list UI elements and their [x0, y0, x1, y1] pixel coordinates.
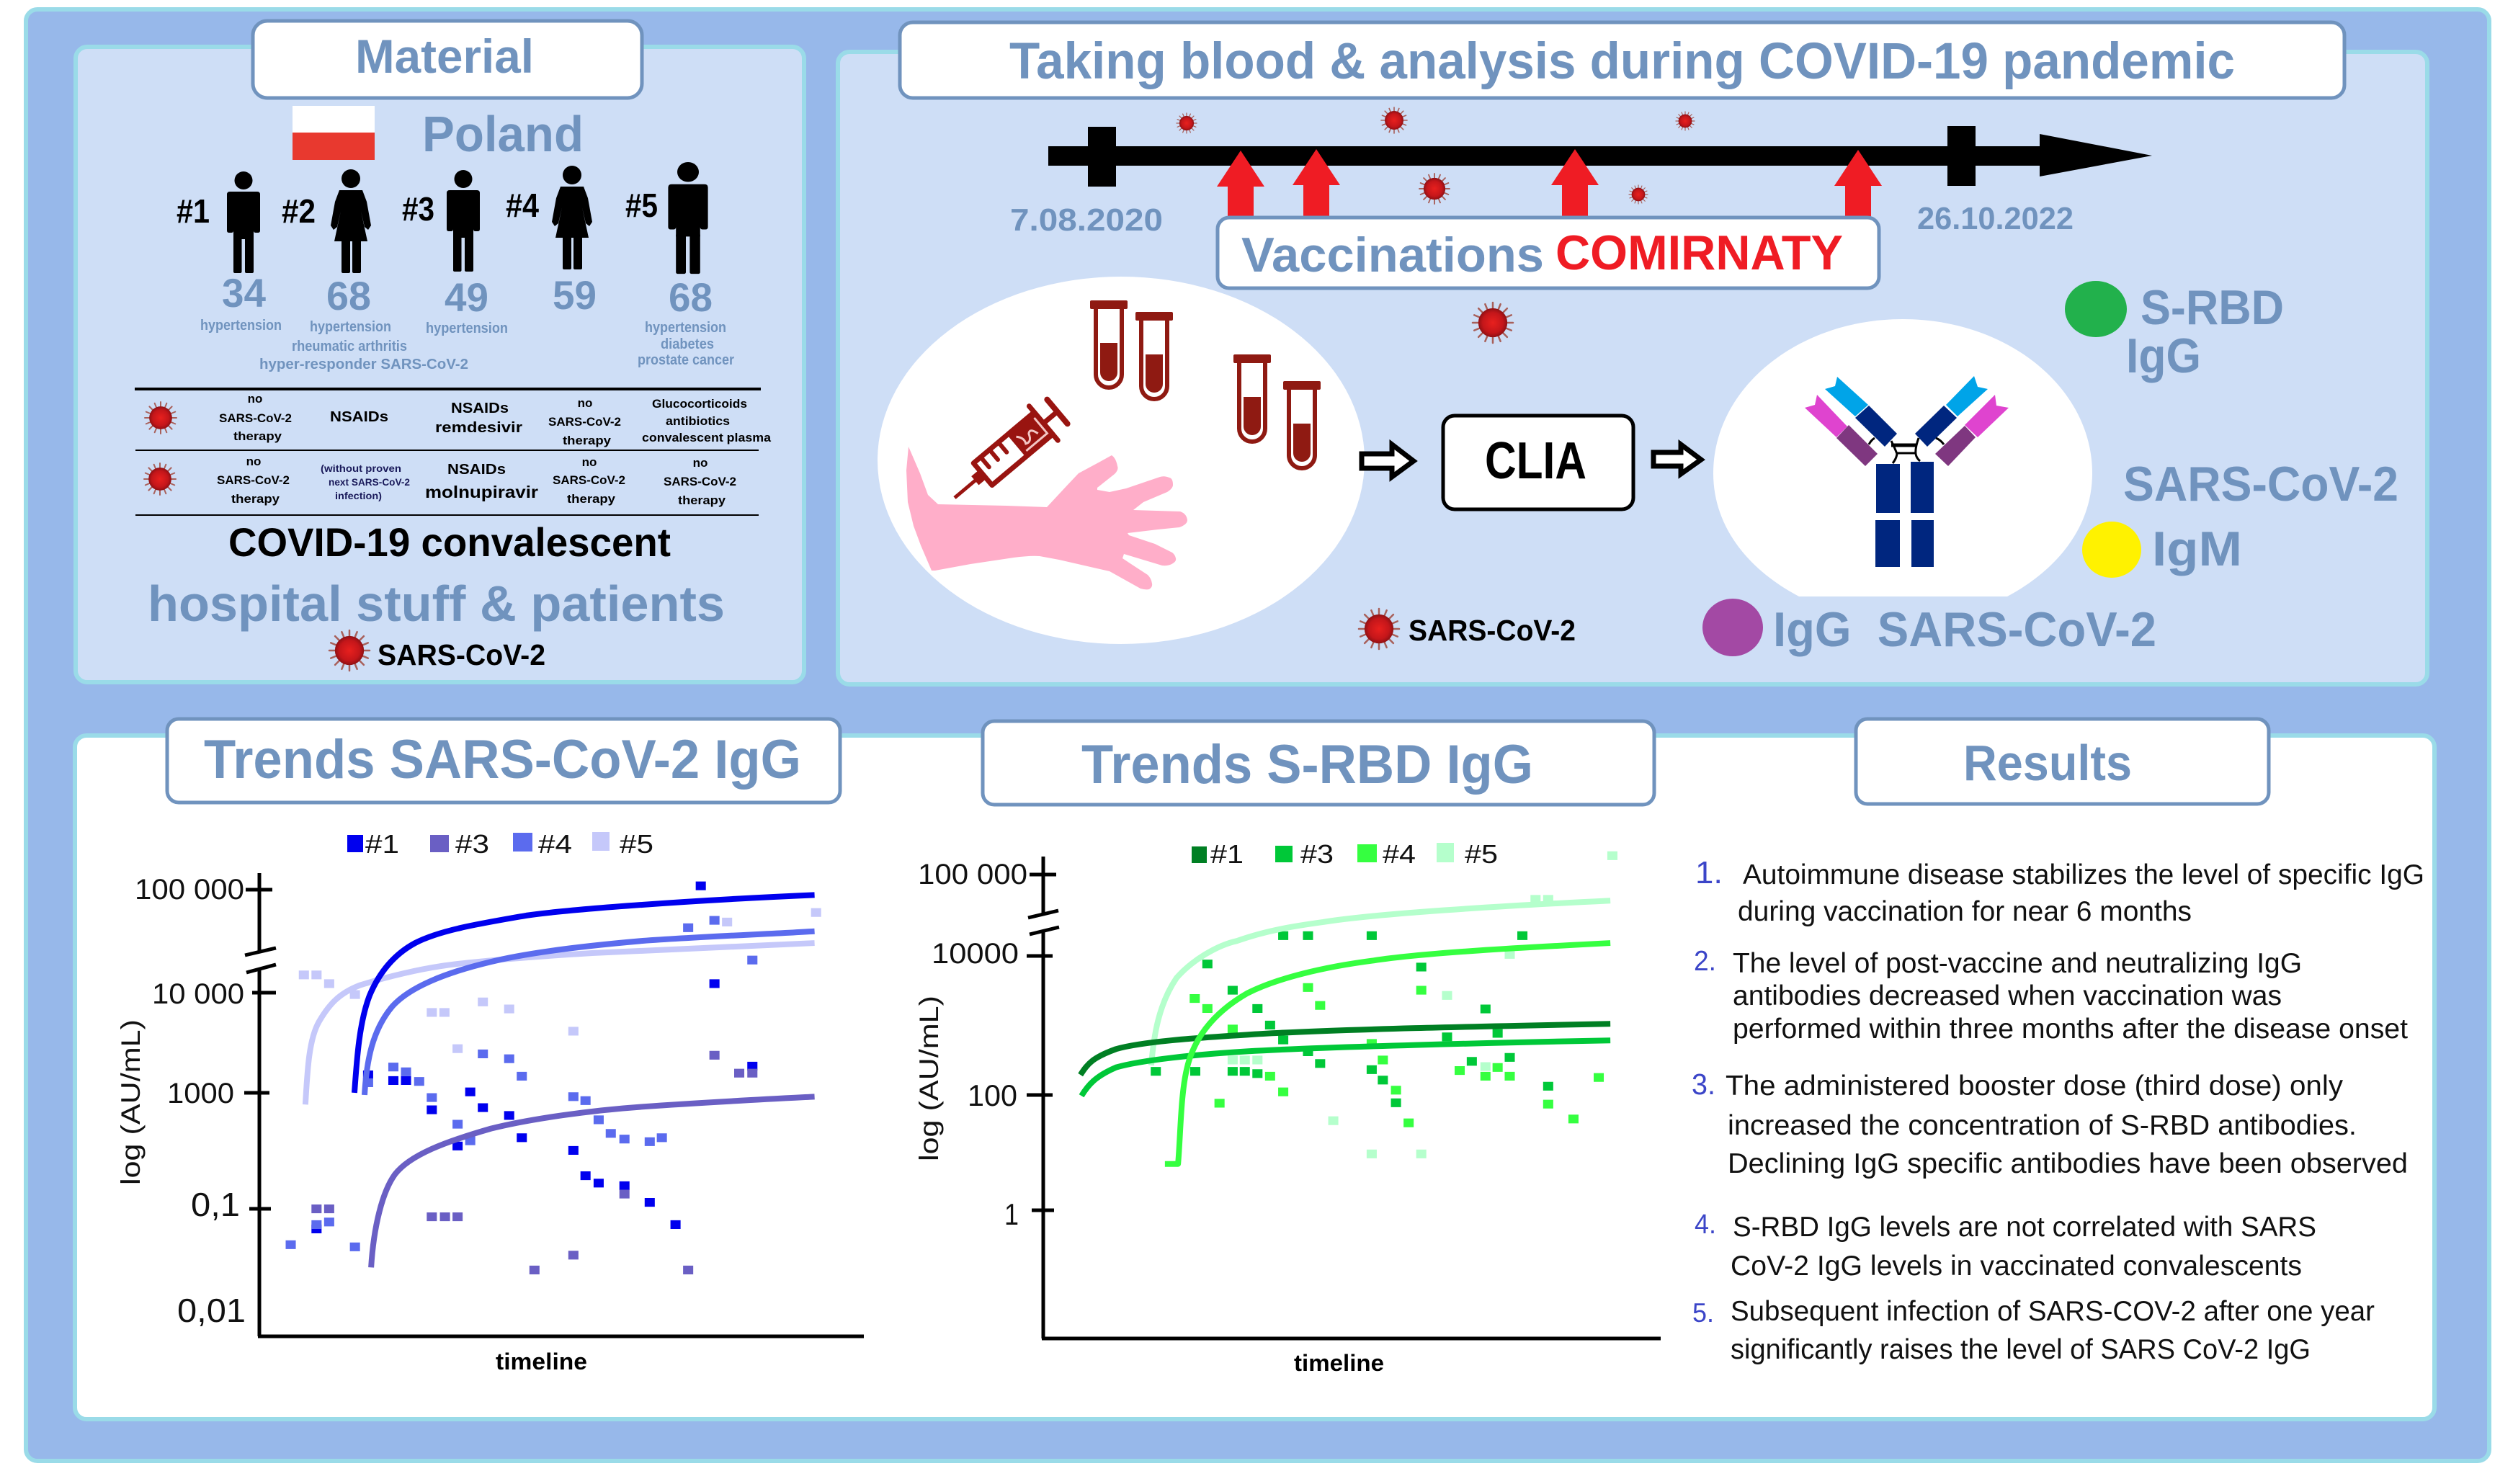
- caption: hospital staff and patients: hospital stuff & patients: [148, 576, 725, 632]
- axes: chart 2: [1027, 857, 1661, 1338]
- box: CLIA: CLIA: [1485, 432, 1586, 490]
- data: chart 2 points and curves: [1081, 856, 1612, 1164]
- legend: chart 1: #3: [455, 829, 489, 859]
- axis labels: chart 2: 10000: [932, 938, 1019, 970]
- result 1: during vaccination for near 6 months: [1738, 896, 2192, 927]
- therapy row 1: therapy: [233, 429, 282, 443]
- heading: trends SARS-CoV-2: Trends SARS-CoV-2 IgG: [204, 729, 801, 790]
- result 4: CoV-2 IgG levels in vaccinated convalescents: [1731, 1251, 2302, 1282]
- data: chart 1 points and curves: [291, 886, 816, 1270]
- icon: virus row 2: [144, 463, 176, 495]
- therapy row 1: convalescent plasma: [642, 431, 772, 444]
- patient 5: diabetes: [661, 336, 714, 352]
- result 3: 3.: [1692, 1068, 1715, 1101]
- axis labels: chart 1: 10 000: [152, 978, 244, 1010]
- patient 1: hypertension: [200, 318, 282, 334]
- heading: trends S-RBD: Trends S-RBD IgG: [1081, 734, 1533, 795]
- axis labels: chart 2: 100 000: [918, 859, 1027, 890]
- result 3: [1692, 1068, 2408, 1179]
- axis labels: chart 2: log (AU/mL): [914, 996, 944, 1161]
- axis labels: chart 1: 0,01: [177, 1292, 246, 1329]
- antibody hinge: [1869, 438, 1944, 463]
- therapy row 2: infection): [335, 490, 382, 501]
- icon: syringe: [940, 395, 1071, 515]
- legend: chart 2: #4: [1383, 839, 1416, 869]
- heading: trends SARS-CoV-2: [167, 719, 840, 803]
- antibody arms: [1805, 376, 2009, 466]
- therapy row 2: no: [246, 455, 261, 468]
- heading: taking blood: Taking blood & analysis during COVID-19 pandemic: [1009, 33, 2235, 90]
- result 5: 5.: [1692, 1298, 1714, 1328]
- axis labels: chart 1: log (AU/mL): [116, 1019, 146, 1185]
- result 5: Subsequent infection of SARS-COV-2 after one year: [1731, 1296, 2375, 1327]
- chart: trends S-RBD IgG: [914, 721, 1661, 1376]
- axis labels: chart 1: timeline: [496, 1349, 587, 1375]
- caption: convalescent: COVID-19 convalescent: [228, 519, 671, 565]
- legend: S-RBD IgG: [2065, 280, 2284, 383]
- legend: virus: [1359, 609, 1576, 649]
- patient 3: hypertension: [426, 321, 508, 336]
- therapy row 1: therapy: [563, 434, 612, 447]
- axis labels: chart 1: 1000: [167, 1078, 234, 1109]
- patient 5: 68: [669, 274, 713, 320]
- therapy row 1: NSAIDs: [451, 401, 509, 416]
- therapy row 2: therapy: [231, 492, 280, 506]
- therapy row 1: no: [248, 392, 262, 406]
- therapy row 1: antibiotics: [666, 414, 730, 428]
- therapy row 1: SARS-CoV-2: [548, 415, 621, 429]
- vaccination arrows: [1217, 149, 1882, 218]
- axis labels: chart 1: [116, 874, 587, 1375]
- axis labels: chart 2: 1: [1004, 1197, 1019, 1231]
- therapy row 1: Glucocorticoids: [652, 397, 747, 411]
- result 2: [1694, 946, 2408, 1045]
- result 2: The level of post-vaccine and neutralizing IgG: [1733, 948, 2302, 979]
- patient 5: hypertension: [645, 320, 726, 336]
- legend: chart 2: #1: [1210, 839, 1244, 869]
- panel: results: [1692, 719, 2424, 1365]
- therapy row 2: SARS-CoV-2: [664, 475, 736, 488]
- axes: chart 1: [244, 873, 864, 1336]
- patient 1: 34: [222, 270, 266, 316]
- callout: vaccinations: [1218, 218, 1879, 288]
- therapy row 1: [219, 392, 772, 447]
- therapy row 2: NSAIDs: [447, 462, 506, 478]
- legend: S-RBD IgG: S-RBD: [2141, 280, 2284, 335]
- result 2: 2.: [1694, 946, 1716, 977]
- icons: blood tubes: [1090, 300, 1321, 468]
- heading: trends S-RBD: [983, 721, 1654, 805]
- result 3: increased the concentration of S-RBD antibodies.: [1728, 1110, 2357, 1141]
- legend: chart 1: #1: [365, 829, 399, 859]
- result 3: The administered booster dose (third dose) only: [1726, 1070, 2344, 1101]
- legend: IgG SARS-CoV-2: IgG SARS-CoV-2: [1773, 602, 2156, 657]
- patient 2: rheumatic arthritis: [292, 339, 407, 354]
- legend: SARS-CoV-2 IgM: SARS-CoV-2: [2123, 457, 2398, 511]
- heading: taking blood: [900, 22, 2344, 98]
- therapy row 2: SARS-CoV-2: [553, 473, 625, 487]
- arrow: to CLIA: [1362, 444, 1414, 477]
- icons: viruses along timeline: [1177, 107, 1695, 343]
- result 1: Autoimmune disease stabilizes the level of specific IgG: [1743, 859, 2424, 890]
- legend: chart 2: #3: [1300, 839, 1334, 869]
- legend: S-RBD IgG: IgG: [2126, 328, 2201, 383]
- result 2: performed within three months after the disease onset: [1733, 1014, 2408, 1045]
- therapy row 2: no: [582, 455, 597, 469]
- result 4: 4.: [1695, 1210, 1716, 1240]
- heading: material: Material: [355, 30, 534, 83]
- panel: trends and results: [75, 719, 2434, 1419]
- legend: virus: SARS-CoV-2: [1409, 614, 1576, 647]
- legend: virus SARS-CoV-2: [329, 630, 545, 671]
- patient 4: [506, 166, 597, 318]
- therapy row 2: therapy: [678, 493, 726, 507]
- axis labels: chart 1: 100 000: [135, 874, 244, 906]
- therapy row 1: NSAIDs: [330, 409, 388, 425]
- icon: arm and hand: [906, 447, 1187, 589]
- result 4: S-RBD IgG levels are not correlated with SARS: [1733, 1212, 2316, 1243]
- box: CLIA: [1443, 416, 1633, 509]
- icon: Polish flag: [293, 106, 375, 160]
- therapy row 1: no: [578, 396, 592, 410]
- axis labels: chart 2: timeline: [1294, 1350, 1384, 1376]
- legend: SARS-CoV-2 IgM: IgM: [2152, 522, 2242, 576]
- result 5: significantly raises the level of SARS CoV-2 IgG: [1731, 1334, 2311, 1365]
- legend: chart 1: [347, 829, 653, 859]
- therapy table: [135, 388, 772, 516]
- therapy row 2: SARS-CoV-2: [217, 473, 290, 487]
- patient 2: hypertension: [310, 319, 391, 335]
- therapy row 1: SARS-CoV-2: [219, 411, 292, 425]
- legend: chart 1: #5: [620, 829, 653, 859]
- callout: vaccinations: COMIRNATY: [1555, 225, 1843, 280]
- arrow: from CLIA: [1653, 444, 1701, 474]
- patient 3: [402, 170, 508, 336]
- legend: chart 2: [1192, 839, 1498, 869]
- patient 5: prostate cancer: [638, 352, 734, 368]
- axis labels: chart 1: 0,1: [191, 1186, 240, 1223]
- patient 5: #5: [625, 187, 658, 224]
- callout: vaccinations: Vaccinations: [1241, 228, 1544, 282]
- chart: trends SARS-CoV-2 IgG: [116, 719, 864, 1375]
- panel: taking blood and analysis: [838, 22, 2427, 684]
- icon: virus row 1: [145, 402, 177, 434]
- illustration: antibody: [1713, 319, 2092, 596]
- panel: material: [76, 21, 804, 682]
- result 3: Declining IgG specific antibodies have been observed: [1728, 1148, 2408, 1179]
- country label: Poland: [422, 106, 584, 162]
- therapy row 2: therapy: [567, 492, 616, 506]
- axis labels: chart 2: 100: [968, 1078, 1017, 1112]
- result 1: 1.: [1695, 855, 1723, 890]
- patient 2: #2: [282, 192, 316, 230]
- patient 1: #1: [177, 192, 210, 230]
- heading: results: [1856, 719, 2269, 804]
- result 2: antibodies decreased when vaccination was: [1733, 980, 2282, 1011]
- patient 2: 68: [326, 273, 371, 318]
- end date: 26.10.2022: [1917, 201, 2074, 236]
- patient 4: 59: [553, 272, 597, 318]
- timeline arrow: [1048, 126, 2152, 187]
- result 1: [1695, 855, 2424, 927]
- result 5: [1692, 1296, 2375, 1365]
- legend: chart 2: #5: [1465, 839, 1498, 869]
- patient 1: [177, 171, 282, 334]
- patient 2: [259, 169, 468, 372]
- therapy row 2: molnupiravir: [425, 483, 538, 501]
- illustration: blood draw: [878, 277, 1365, 644]
- therapy row 2: no: [693, 456, 708, 470]
- patient 2: hyper-responder SARS-CoV-2: [259, 357, 468, 372]
- antibody stem: [1875, 462, 1934, 567]
- patient 3: 49: [445, 274, 488, 320]
- legend: virus SARS-CoV-2: SARS-CoV-2: [378, 638, 545, 671]
- legend: SARS-CoV-2 IgM: [2082, 457, 2398, 578]
- therapy row 2: (without proven: [321, 462, 401, 474]
- patient 4: #4: [506, 187, 539, 224]
- patient 3: #3: [402, 190, 434, 228]
- legend: chart 1: #4: [538, 829, 572, 859]
- start date: 7.08.2020: [1010, 202, 1163, 238]
- therapy row 2: [217, 455, 736, 507]
- therapy row 2: next SARS-CoV-2: [329, 476, 410, 488]
- heading: results: Results: [1963, 735, 2132, 791]
- heading: material: [253, 21, 642, 98]
- axis labels: chart 2: [914, 859, 1384, 1376]
- result 4: [1695, 1210, 2316, 1282]
- therapy row 1: remdesivir: [435, 420, 522, 436]
- patient 5: [625, 162, 734, 368]
